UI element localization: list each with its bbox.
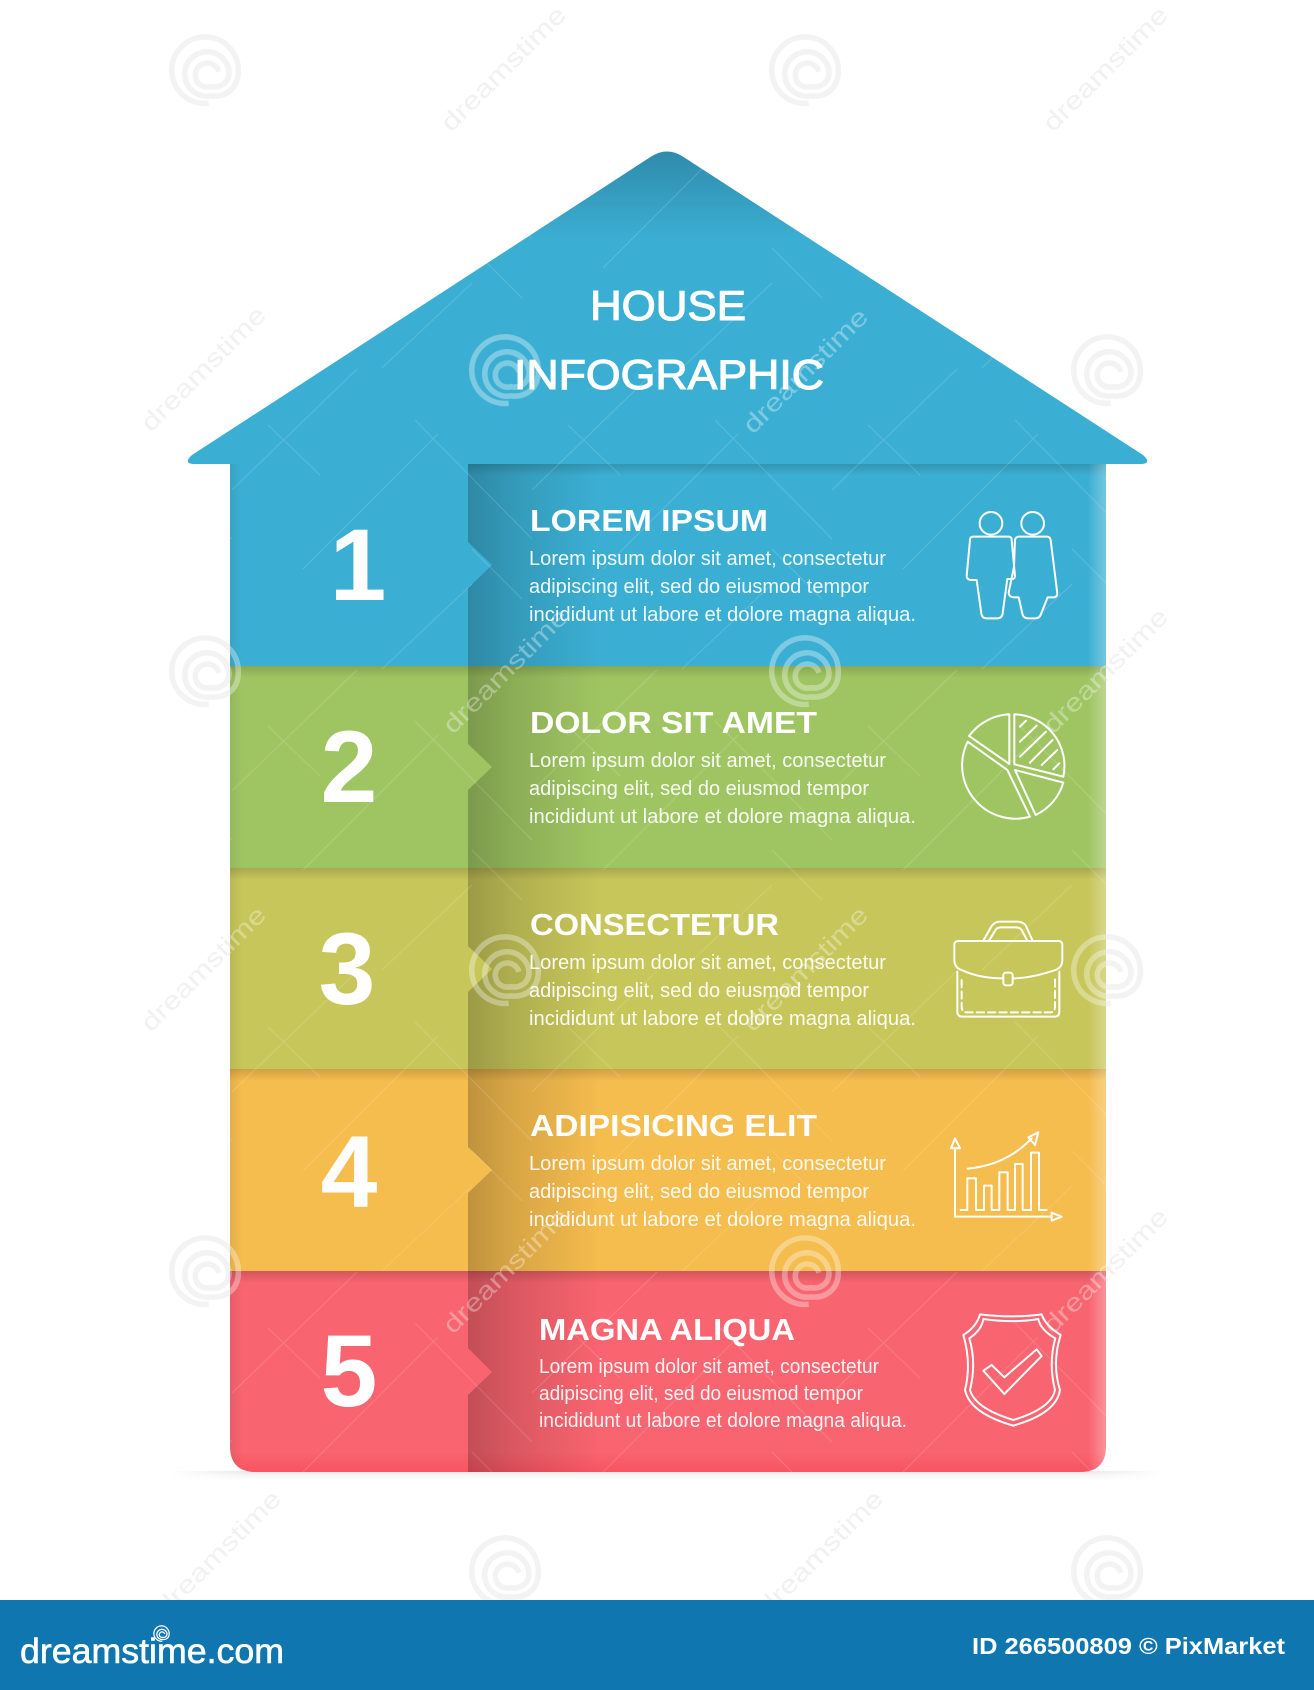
row 4 band xyxy=(230,1069,1106,1271)
text block 1 xyxy=(529,503,916,626)
row 5 band xyxy=(230,1271,1106,1472)
text block 3: incididunt ut labore et dolore magna aliqua. xyxy=(529,1007,916,1030)
title: HOUSE xyxy=(590,282,746,329)
footer logo: dreamstime.com xyxy=(20,1632,284,1671)
text block 2: incididunt ut labore et dolore magna aliqua. xyxy=(529,805,916,828)
text block 1: Lorem ipsum dolor sit amet, consectetur xyxy=(529,547,886,570)
text block 2: DOLOR SIT AMET xyxy=(530,705,817,740)
ground shadow xyxy=(170,1471,1165,1483)
icon: shield xyxy=(963,1314,1061,1426)
watermark on white background: dreamstime xyxy=(435,1,572,137)
text block 3: Lorem ipsum dolor sit amet, consectetur xyxy=(529,951,886,974)
watermark on white background: dreamstime xyxy=(150,1485,287,1621)
number 4: 4 xyxy=(321,1115,378,1229)
icon: growth chart xyxy=(951,1132,1062,1221)
text block 5: incididunt ut labore et dolore magna aliqua. xyxy=(539,1409,907,1432)
watermark over house: dreamstime xyxy=(737,901,874,1037)
text block 5: adipiscing elit, sed do eiusmod tempor xyxy=(539,1382,863,1405)
footer bar xyxy=(0,1600,1314,1690)
watermark over house: dreamstime xyxy=(437,603,574,739)
icon: briefcase xyxy=(954,922,1062,1017)
text block 3 xyxy=(529,907,916,1030)
text block 2: adipiscing elit, sed do eiusmod tempor xyxy=(529,777,869,800)
text block 4 xyxy=(529,1108,916,1231)
text block 2 xyxy=(529,705,916,828)
watermark lines over house xyxy=(230,169,1106,1472)
icon: pie chart xyxy=(962,714,1064,819)
watermark over house: dreamstime xyxy=(1037,603,1174,739)
number tab notches xyxy=(467,541,492,1396)
watermark over house xyxy=(230,312,1106,1332)
text block 5: MAGNA ALIQUA xyxy=(539,1312,795,1347)
house body xyxy=(230,464,1106,1472)
text block 4: ADIPISICING ELIT xyxy=(530,1108,817,1143)
watermark on white background: dreamstime xyxy=(135,301,272,437)
row 2 band xyxy=(230,666,1106,868)
right edge highlight xyxy=(1090,464,1106,1470)
footer credit: ID 266500809 © PixMarket xyxy=(972,1633,1285,1659)
panel fold shadow xyxy=(468,464,576,1472)
text block 1: incididunt ut labore et dolore magna aliqua. xyxy=(529,603,916,626)
text block 1: adipiscing elit, sed do eiusmod tempor xyxy=(529,575,869,598)
text block 4: adipiscing elit, sed do eiusmod tempor xyxy=(529,1180,869,1203)
title xyxy=(514,282,824,398)
watermark on white background: dreamstime xyxy=(752,1485,889,1621)
row 1 band xyxy=(230,464,1106,666)
text block 3: adipiscing elit, sed do eiusmod tempor xyxy=(529,979,869,1002)
number 5: 5 xyxy=(321,1314,377,1428)
watermark over house: dreamstime xyxy=(437,1203,574,1339)
text block 3: CONSECTETUR xyxy=(530,907,779,942)
number 3: 3 xyxy=(319,912,375,1026)
watermark over house: dreamstime xyxy=(1037,1203,1174,1339)
text block 4: Lorem ipsum dolor sit amet, consectetur xyxy=(529,1152,886,1175)
text block 5 xyxy=(539,1312,907,1432)
watermark over house: dreamstime xyxy=(737,303,874,439)
watermark on white background: dreamstime xyxy=(1037,1,1174,137)
text block 4: incididunt ut labore et dolore magna aliqua. xyxy=(529,1208,916,1231)
left edge shade xyxy=(230,464,236,1464)
text block 1: LOREM IPSUM xyxy=(530,503,768,538)
title: INFOGRAPHIC xyxy=(514,351,824,398)
roof xyxy=(188,152,1147,464)
watermark on white background: dreamstime xyxy=(1037,1203,1174,1339)
watermark on white background: dreamstime xyxy=(1037,603,1174,739)
watermark over house: dreamstime xyxy=(135,901,272,1037)
row 3 band xyxy=(230,868,1106,1069)
watermark on white background xyxy=(135,1,1174,1621)
text block 2: Lorem ipsum dolor sit amet, consectetur xyxy=(529,749,886,772)
number 2: 2 xyxy=(321,710,377,824)
icon: people xyxy=(967,512,1057,618)
number 1: 1 xyxy=(330,508,386,622)
text block 5: Lorem ipsum dolor sit amet, consectetur xyxy=(539,1355,879,1378)
watermark on white background: dreamstime xyxy=(135,901,272,1037)
